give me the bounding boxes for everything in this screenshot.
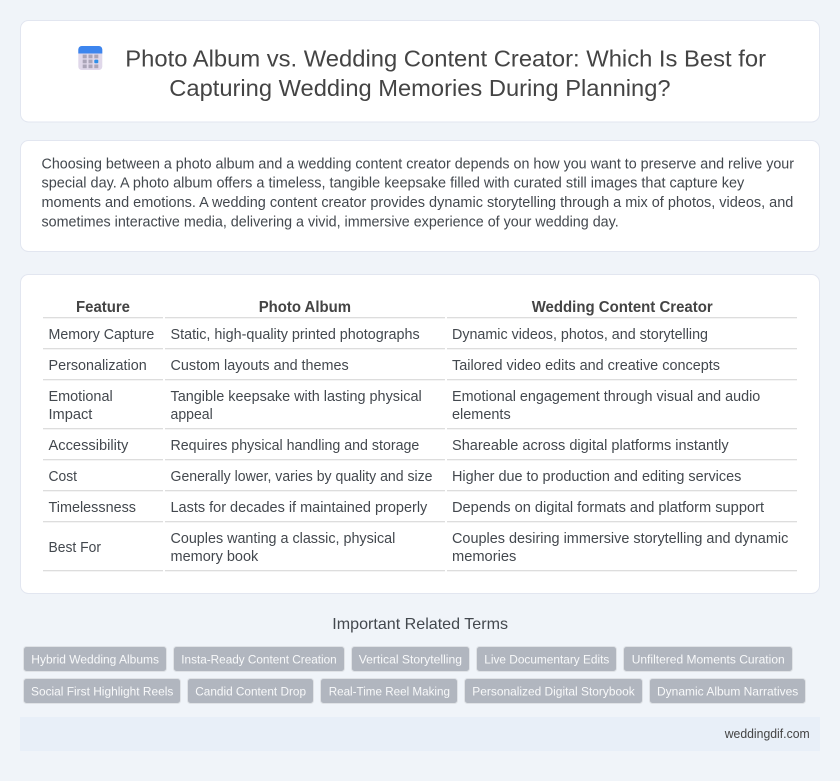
row: timelessness: [48, 500, 764, 516]
intro paragraph: moments and emotions. A wedding content creator provides dynamic storytelling through a mix of photos, videos, and: [42, 195, 793, 211]
panel: title card: [20, 20, 820, 122]
row: emotional impact: [48, 389, 760, 423]
row: best for: Best For: [48, 540, 101, 556]
row: cost: Higher due to production and editing services: [452, 469, 741, 485]
tags: related terms: [24, 646, 806, 704]
row: accessibility: Shareable across digital platforms instantly: [452, 438, 730, 454]
tag: [476, 646, 616, 672]
tag: [174, 646, 344, 672]
row: cost: [48, 469, 741, 485]
row: emotional impact: elements: [452, 407, 511, 423]
row: timelessness: Timelessness: [48, 500, 136, 516]
footer bar: [20, 717, 820, 751]
title: Capturing Wedding Memories During Planning?: [169, 75, 671, 101]
intro paragraph: sometimes interactive media, delivering a vivid, immersive experience of your wedding day.: [42, 215, 619, 231]
tag: [352, 646, 470, 672]
panel: comparison table: [20, 274, 820, 594]
tag: [320, 678, 458, 704]
icon: calendar: [78, 46, 102, 70]
row: emotional impact: Emotional engagement through visual and audio: [452, 389, 760, 405]
row: best for: [48, 531, 788, 565]
row: personalization: [48, 358, 720, 374]
row: emotional impact: Emotional: [48, 389, 113, 405]
row: accessibility: Requires physical handling and storage: [170, 438, 419, 454]
tag: Dynamic Album Narratives: [657, 684, 798, 698]
heading: important related terms: Important Related Terms: [332, 616, 508, 633]
row: memory capture: Dynamic videos, photos, and storytelling: [452, 327, 708, 343]
title: [125, 46, 766, 101]
tag: [188, 678, 314, 704]
intro paragraph: [42, 156, 794, 231]
intro paragraph: Choosing between a photo album and a wedding content creator depends on how you want to preserve and relive your: [42, 156, 794, 172]
tag: [624, 646, 792, 672]
footer source: weddingdif.com: [724, 727, 810, 741]
tag: Unfiltered Moments Curation: [632, 652, 785, 666]
row: best for: memory book: [170, 549, 259, 565]
panel: introduction: [20, 140, 820, 252]
row: personalization: Custom layouts and themes: [170, 358, 349, 374]
table header: Photo Album: [259, 299, 351, 316]
tag: [650, 678, 806, 704]
tag: Vertical Storytelling: [359, 652, 462, 666]
tag: Hybrid Wedding Albums: [31, 652, 159, 666]
row: cost: Generally lower, varies by quality and size: [170, 469, 432, 485]
row: timelessness: Lasts for decades if maintained properly: [170, 500, 428, 516]
row: personalization: Tailored video edits and creative concepts: [452, 358, 720, 374]
intro paragraph: special day. A photo album offers a timeless, tangible keepsake filled with curated still images that capture key: [42, 176, 745, 192]
row: cost: Cost: [48, 469, 77, 485]
row: personalization: Personalization: [48, 358, 147, 374]
row: memory capture: Static, high-quality printed photographs: [170, 327, 420, 343]
tag: Personalized Digital Storybook: [472, 684, 635, 698]
row: accessibility: [48, 438, 730, 454]
table header: Feature: [76, 299, 130, 316]
tag: [24, 646, 166, 672]
row: emotional impact: Impact: [48, 407, 92, 423]
tag: Real-Time Reel Making: [329, 684, 450, 698]
tag: Insta-Ready Content Creation: [181, 652, 337, 666]
row: emotional impact: Tangible keepsake with lasting physical: [170, 389, 422, 405]
tag: [464, 678, 642, 704]
title: Photo Album vs. Wedding Content Creator: Which Is Best for: [125, 46, 766, 72]
tag: [24, 678, 180, 704]
row: accessibility: Accessibility: [48, 438, 129, 454]
table header: [76, 299, 713, 316]
row: memory capture: Memory Capture: [48, 327, 154, 343]
tag: Candid Content Drop: [195, 684, 306, 698]
row: best for: Couples desiring immersive storytelling and dynamic: [452, 531, 788, 547]
row: best for: Couples wanting a classic, physical: [170, 531, 395, 547]
row: memory capture: [48, 327, 708, 343]
table header: Wedding Content Creator: [532, 299, 713, 316]
row: best for: memories: [452, 549, 516, 565]
tag: Social First Highlight Reels: [31, 684, 173, 698]
row: timelessness: Depends on digital formats and platform support: [452, 500, 764, 516]
tag: Live Documentary Edits: [484, 652, 609, 666]
row: emotional impact: appeal: [170, 407, 213, 423]
